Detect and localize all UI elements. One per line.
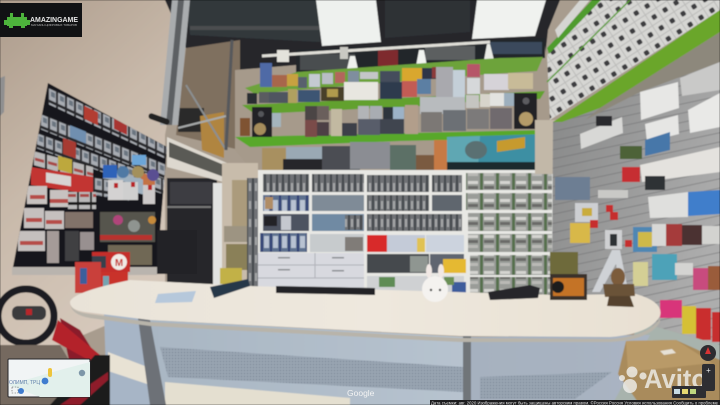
shelf 3 [235, 130, 545, 147]
map inset: ОЛИМП, ТРЦ [9, 380, 40, 386]
keychains [100, 180, 156, 265]
map inset [8, 359, 90, 397]
brand logo: AMAZINGAME [30, 17, 78, 24]
map controls [672, 345, 716, 398]
right panel [471, 335, 650, 405]
game poster [447, 134, 552, 170]
blue paper [155, 291, 196, 303]
middle bay shelves [367, 175, 466, 297]
speaker left [252, 107, 272, 137]
wall accessories [555, 167, 720, 342]
green ledge [553, 10, 720, 122]
Avito watermark [619, 364, 707, 394]
brand logo: МАГАЗИН ЦИФРОВЫХ ТОВАРОВ [31, 23, 77, 27]
Avito watermark: Avito [644, 364, 707, 394]
cardboard box [618, 340, 720, 405]
shelf products [240, 63, 537, 137]
dark pad [488, 285, 540, 300]
drawers [256, 253, 364, 290]
map controls: + [706, 366, 711, 375]
promo card [550, 274, 587, 300]
bunny plush [422, 264, 448, 302]
icon: space invader [4, 13, 30, 28]
right bay shelves [466, 173, 554, 297]
mario box display: M [115, 258, 123, 269]
left wall [0, 0, 190, 345]
ceiling [165, 0, 560, 78]
shelf products above green ledge [547, 0, 720, 122]
metal column and back room [148, 0, 240, 158]
white boxes [580, 62, 720, 218]
pegboard [12, 83, 170, 275]
card terminal [210, 279, 250, 298]
ceiling light left [316, 0, 381, 46]
white bookcase [256, 170, 556, 298]
alcove with soffit [157, 137, 258, 288]
dark floor under map [0, 345, 108, 405]
counter top [70, 280, 660, 342]
counter items [155, 264, 635, 307]
blue and multicolour packs [103, 155, 159, 181]
wall right of bookcase [535, 120, 557, 174]
display items by counter [550, 250, 628, 292]
bronze bust [603, 268, 635, 307]
items above bookcase [262, 140, 447, 172]
shelf 2 [242, 91, 545, 114]
counter lower front [104, 312, 650, 405]
panel gap [138, 318, 166, 405]
back wall [235, 45, 556, 178]
black keyboard [276, 286, 375, 295]
left bay shelves [260, 174, 364, 252]
top dark banner [262, 38, 545, 73]
mario box display [75, 252, 130, 293]
green shelves [235, 57, 545, 147]
main front panel [150, 320, 465, 405]
speaker right [514, 93, 537, 129]
brand logo [0, 3, 82, 37]
ceiling light right [472, 0, 546, 39]
shelf 1 [245, 57, 543, 94]
steering wheel [0, 289, 100, 405]
left curved end [104, 312, 165, 405]
cream base [165, 382, 350, 405]
Google watermark: Google [347, 388, 375, 398]
right slatwall [552, 30, 720, 346]
floor right of counter [600, 322, 720, 405]
